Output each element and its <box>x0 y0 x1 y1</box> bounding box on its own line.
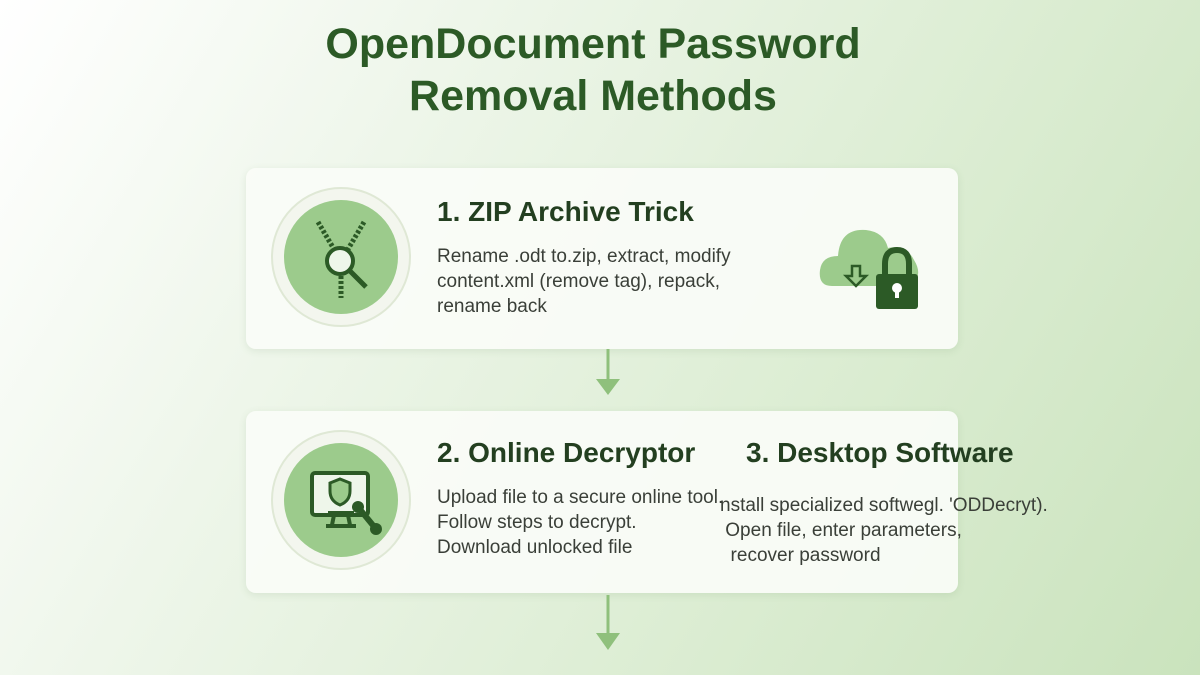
arrow 1 <box>596 349 620 395</box>
title <box>325 20 861 120</box>
icon: zipper with magnifier <box>271 187 411 327</box>
title: Removal Methods <box>409 72 777 120</box>
text 3 <box>720 495 1048 566</box>
panel: ZIP archive trick <box>246 168 958 349</box>
text 2: Follow steps to decrypt. <box>437 512 637 533</box>
text 3: Open file, enter parameters, <box>725 520 962 541</box>
icon: cloud with lock <box>820 230 918 309</box>
heading 3: 3. Desktop Software <box>746 437 1014 468</box>
text 2: Download unlocked file <box>437 537 632 558</box>
text 2: Upload file to a secure online tool. <box>437 487 723 508</box>
text: rename back <box>437 296 547 317</box>
title: OpenDocument Password <box>325 20 861 68</box>
text 3: recover password <box>731 545 881 566</box>
text: content.xml (remove tag), repack, <box>437 271 720 292</box>
text 2 <box>437 487 723 558</box>
heading: 1. ZIP Archive Trick <box>437 196 694 227</box>
heading 2: 2. Online Decryptor <box>437 437 695 468</box>
text 3: nstall specialized softwegl. 'ODDecryt). <box>720 495 1048 516</box>
text: Rename .odt to.zip, extract, modify <box>437 246 731 267</box>
text <box>437 246 731 317</box>
icon: monitor with shield and wrench <box>271 430 411 570</box>
panel: online decryptor / desktop software <box>246 411 958 593</box>
arrow 2 <box>596 595 620 650</box>
